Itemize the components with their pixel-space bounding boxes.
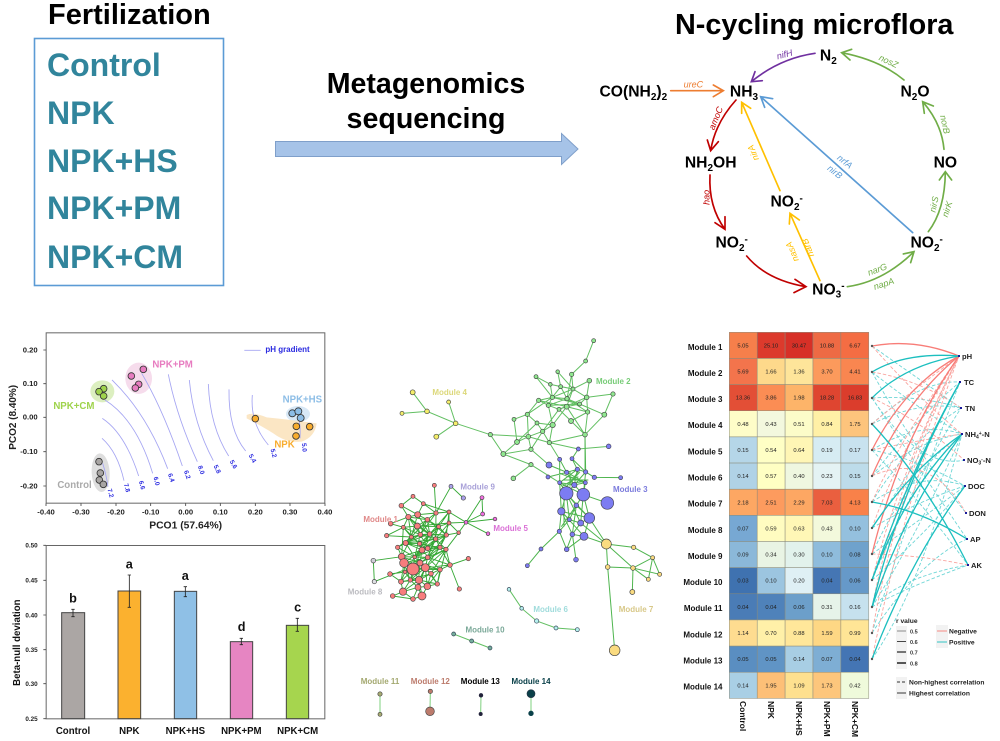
- row labels: Module 4: [688, 421, 723, 430]
- arrow: nitrite to nitrate: [747, 256, 806, 293]
- axis titles: [8, 385, 222, 531]
- x axis ticks and labels: 0.10: [213, 508, 228, 517]
- nitrogen compound labels: 2: [912, 92, 918, 103]
- heatmap values: 0.63: [793, 526, 805, 532]
- module 5, 8, 9 nodes: [371, 484, 497, 584]
- x axis labels: [56, 726, 318, 737]
- y axis ticks and labels: [20, 345, 46, 490]
- text: Metagenomics sequencing: sequencing: [347, 103, 505, 135]
- highest negative correlations: [872, 344, 959, 554]
- arrow: narG napA: [847, 252, 914, 292]
- nitrogen compound labels: 2: [794, 202, 800, 213]
- soil property labels: NH: [965, 430, 976, 439]
- pH contour labels: 6.2: [182, 469, 192, 481]
- soil property labels: TC: [964, 378, 975, 387]
- legend: correlation lines: Positive: [949, 640, 975, 646]
- heatmap values: [736, 344, 862, 689]
- heatmap values: 3.70: [821, 370, 833, 376]
- pH contour labels: 7.8: [122, 483, 131, 494]
- module labels: Module 3: [613, 485, 648, 494]
- arrow: nosZ: nosZ: [877, 53, 900, 70]
- nitrogen compound labels: N: [820, 48, 831, 65]
- module 12 pair: [426, 689, 434, 716]
- heatmap values: 0.14: [737, 683, 749, 689]
- heatmap values: 0.10: [849, 526, 861, 532]
- y axis ticks and labels: -0.10: [20, 447, 38, 456]
- nitrogen compound labels: ): [656, 84, 662, 101]
- heatmap values: 0.23: [821, 474, 833, 480]
- chart: co-occurrence network: [348, 339, 662, 716]
- y axis title: Beta-null deviation: [12, 599, 23, 686]
- heatmap values: 0.40: [793, 474, 805, 480]
- row labels: Module 12: [683, 630, 723, 640]
- pH contour labels: 6.4: [166, 472, 176, 484]
- heatmap values: 0.04: [737, 605, 749, 611]
- heatmap values: 4.41: [849, 370, 861, 376]
- module 4 nodes: [400, 390, 458, 439]
- heatmap values: 1.09: [793, 683, 805, 689]
- heatmap values: 0.30: [793, 552, 805, 558]
- module endpoint dots: [871, 345, 873, 660]
- heatmap values: 0.07: [821, 657, 833, 663]
- arrow: norB: [923, 102, 952, 149]
- x axis ticks and labels: 0.40: [318, 508, 332, 517]
- nitrogen compound labels: [600, 48, 957, 301]
- nitrogen compound labels: 2: [662, 92, 668, 103]
- heatmap values: 0.04: [849, 657, 861, 663]
- group labels: NPK+HS: [283, 394, 323, 405]
- arrow: narG napA: narG: [866, 261, 888, 278]
- heatmap values: 4.13: [849, 500, 861, 506]
- x axis ticks and labels: 0.20: [248, 508, 263, 517]
- heatmap values: 0.54: [765, 448, 777, 454]
- nitrogen compound labels: NH: [685, 155, 707, 172]
- arrow: to N-cycling: [276, 134, 578, 164]
- heatmap values: 1.73: [821, 683, 833, 689]
- soil property labels: AK: [971, 561, 982, 570]
- arrow: nasA narB: narB: [800, 237, 816, 258]
- x axis ticks and labels: -0.20: [107, 508, 125, 517]
- heatmap values: 0.03: [737, 579, 749, 585]
- arrow: nirS nirK: [928, 172, 955, 232]
- panel: fertilization treatments: Control: [47, 47, 161, 83]
- axis titles: PCO2 (8.40%): [8, 385, 19, 450]
- x axis labels: NPK+PM: [221, 726, 262, 737]
- heatmap values: 5.69: [737, 370, 749, 376]
- nitrogen compound labels: 2: [707, 163, 713, 174]
- column labels: NPK+CM: [850, 701, 860, 737]
- non-highest positive correlations: [872, 346, 968, 659]
- module labels: [348, 377, 654, 686]
- heatmap values: 0.48: [737, 422, 749, 428]
- heatmap values: 0.17: [849, 448, 861, 454]
- network edges: module 3 and 7: [527, 435, 660, 650]
- soil property labels: -N: [982, 430, 990, 439]
- row labels: Module 9: [688, 552, 723, 561]
- y axis labels: 0.25: [25, 716, 38, 723]
- nitrogen compound labels: -: [745, 234, 748, 245]
- heatmap values: 0.42: [849, 683, 861, 689]
- pH contour labels: 5.4: [247, 453, 257, 465]
- significance letters: b: [69, 591, 77, 605]
- soil property labels: NO: [967, 456, 978, 465]
- significance letters: c: [294, 601, 301, 615]
- heatmap values: 0.04: [821, 579, 833, 585]
- y axis ticks and labels: -0.20: [20, 481, 38, 490]
- module labels: Module 1: [363, 515, 399, 524]
- heatmap values: 0.10: [821, 552, 833, 558]
- arrow: hao: hao: [701, 190, 711, 205]
- text: Metagenomics sequencing: Metagenomics: [327, 68, 525, 100]
- nitrogen compound labels: -: [800, 193, 803, 204]
- heatmap values: 0.06: [793, 605, 805, 611]
- module labels: Module 6: [533, 605, 569, 614]
- nitrogen compound labels: -: [841, 281, 845, 292]
- heatmap values: 0.09: [737, 552, 749, 558]
- arrow: ureC: ureC: [684, 79, 704, 89]
- text: Metagenomics sequencing: [327, 68, 525, 135]
- panel: fertilization treatments: NPK+CM: [47, 239, 183, 275]
- heatmap values: 30.47: [792, 344, 806, 350]
- heatmap values: 0.14: [793, 657, 805, 663]
- arrow: nrfA nirB: nirB: [825, 163, 844, 181]
- arrow: nirS nirK: nirK: [940, 199, 955, 218]
- significance letters: d: [238, 620, 246, 634]
- heatmap values: 0.16: [849, 605, 861, 611]
- legend: correlation lines: 0.5: [910, 630, 918, 636]
- module labels: Module 13: [461, 677, 500, 686]
- x axis labels: NPK+HS: [166, 726, 206, 737]
- column labels: NPK: [766, 701, 776, 720]
- heatmap values: 0.07: [737, 526, 749, 532]
- heatmap values: 1.36: [793, 370, 805, 376]
- heatmap values: 0.05: [765, 657, 777, 663]
- nitrogen compound labels: NO: [910, 235, 934, 252]
- column labels: Control: [738, 701, 748, 731]
- group labels: NPK+PM: [152, 360, 193, 371]
- row labels: Module 3: [688, 395, 723, 404]
- x axis labels: NPK+CM: [277, 726, 318, 737]
- heatmap values: 0.43: [821, 526, 833, 532]
- legend: correlation lines: Highest correlation: [909, 690, 970, 698]
- chart: beta-null deviation bars: [12, 543, 325, 737]
- heatmap values: 1.95: [765, 683, 777, 689]
- module labels: Module 4: [432, 388, 468, 397]
- row labels: Module 14: [683, 682, 723, 692]
- row labels: Module 7: [688, 500, 723, 508]
- heatmap values: 0.06: [849, 579, 861, 585]
- chart: PCoA scatter plot: [8, 333, 332, 531]
- heatmap values: 0.51: [793, 422, 805, 428]
- nitrogen compound labels: NO: [812, 281, 836, 298]
- row labels: Module 6: [688, 474, 723, 482]
- y axis labels: 0.30: [25, 681, 38, 688]
- arrow: nifH: nifH: [776, 47, 794, 61]
- heatmap values: 0.43: [765, 422, 777, 428]
- row labels: Module 13: [683, 656, 723, 666]
- panel: fertilization treatments: NPK+PM: [47, 190, 181, 226]
- nitrogen compound labels: 2: [934, 243, 940, 254]
- soil property labels: DOC: [968, 482, 985, 491]
- panel: fertilization treatments: NPK: [47, 95, 115, 131]
- heatmap values: 0.84: [821, 422, 833, 428]
- treatment group ellipses: [90, 363, 317, 492]
- module labels: Module 10: [465, 626, 505, 635]
- heatmap values: 0.10: [765, 579, 777, 585]
- arrow: ureC: [671, 79, 723, 97]
- legend: correlation lines: [896, 618, 984, 699]
- y axis ticks and labels: 0.20: [23, 345, 38, 354]
- soil property labels: pH: [962, 352, 972, 361]
- heatmap values: 0.88: [793, 631, 805, 637]
- heatmap values: 2.29: [793, 500, 805, 506]
- arrow: amoC: amoC: [707, 105, 725, 131]
- y axis labels: 0.35: [25, 647, 38, 654]
- pH gradient contour lines: [102, 373, 300, 487]
- group labels: [53, 360, 323, 491]
- heatmap values: 1.98: [793, 396, 805, 402]
- network edges: module 4: [402, 392, 456, 437]
- nitrogen compound labels: 2: [651, 92, 657, 103]
- module labels: Module 8: [348, 587, 383, 596]
- y axis ticks and labels: 0.00: [23, 413, 38, 422]
- legend: correlation lines: r value: [896, 618, 918, 625]
- soil property labels: TN: [965, 404, 975, 413]
- panel: fertilization treatments: NPK+HS: [47, 143, 178, 179]
- data points: [96, 366, 313, 488]
- pH contour labels: 5.2: [269, 448, 278, 459]
- y axis labels: [25, 543, 46, 723]
- heatmap values: 3.86: [765, 396, 777, 402]
- module 7 nodes: [601, 539, 662, 656]
- column labels: [738, 701, 860, 737]
- network edges: module 1, 5, 8, 9: [373, 485, 495, 599]
- heatmap values: 0.14: [737, 474, 749, 480]
- heatmap values: 1.66: [765, 370, 777, 376]
- soil property labels: -: [981, 457, 983, 463]
- heatmap cells: [729, 332, 869, 698]
- heatmap values: 13.36: [736, 396, 750, 402]
- module labels: Module 7: [619, 605, 654, 614]
- group labels: NPK+CM: [53, 401, 94, 412]
- x axis ticks and labels: [37, 503, 332, 517]
- arrow: nirS nirK: nirS: [928, 196, 941, 213]
- module 6 chain: [507, 587, 579, 632]
- row labels: [683, 343, 723, 692]
- x axis labels: Control: [56, 726, 90, 737]
- nitrogen compound labels: 2: [831, 56, 837, 67]
- module labels: Module 11: [361, 677, 400, 686]
- pH contour labels: [106, 443, 308, 499]
- pH contour labels: 5.8: [212, 464, 222, 475]
- arrow: norB: norB: [938, 114, 952, 135]
- heatmap values: 0.31: [821, 605, 833, 611]
- x axis ticks and labels: 0.00: [178, 508, 193, 517]
- row labels: Module 8: [688, 526, 723, 535]
- module labels: Module 12: [411, 677, 450, 686]
- significance letters: [69, 557, 301, 634]
- arrow: narG napA: napA: [872, 276, 895, 292]
- module 2 nodes: [488, 339, 615, 481]
- legend: correlation lines: 0.6: [910, 640, 918, 646]
- column labels: NPK+HS: [794, 701, 804, 736]
- row labels: Module 2: [688, 369, 723, 378]
- row labels: Module 10: [683, 578, 723, 587]
- y axis labels: 0.45: [25, 578, 38, 585]
- group labels: NPK: [274, 440, 295, 451]
- heatmap values: 0.57: [765, 474, 777, 480]
- heatmap values: 5.05: [737, 344, 749, 350]
- legend: correlation lines: Non-highest correlation: [909, 680, 984, 686]
- bars: [62, 591, 309, 719]
- pH contour labels: 5.6: [228, 459, 238, 471]
- significance letters: a: [182, 569, 190, 583]
- arrow: nasA narB: nasA: [784, 240, 801, 263]
- nitrogen compound labels: CO(NH: [600, 84, 651, 101]
- heatmap values: 1.14: [737, 631, 749, 637]
- y axis labels: 0.40: [25, 612, 38, 619]
- arrow: nirA: [742, 102, 780, 191]
- x axis ticks and labels: -0.30: [72, 508, 90, 517]
- nitrogen compound labels: 3: [836, 290, 842, 301]
- nitrogen compound labels: NH: [730, 84, 753, 101]
- heatmap values: 0.70: [765, 631, 777, 637]
- nitrogen compound labels: 3: [753, 92, 759, 103]
- soil property labels: AP: [970, 535, 981, 544]
- heatmap values: 2.51: [765, 500, 777, 506]
- nitrogen compound labels: OH: [713, 155, 737, 172]
- module 3 nodes: [525, 444, 623, 568]
- nitrogen compound labels: NO: [770, 194, 794, 211]
- significance letters: a: [126, 557, 134, 571]
- heatmap values: 0.34: [765, 552, 777, 558]
- module labels: Module 5: [493, 524, 529, 533]
- legend: correlation lines: 0.8: [910, 662, 918, 668]
- error bars: [71, 575, 299, 645]
- heatmap values: 1.75: [849, 422, 861, 428]
- arrow: nrfA nirB: [761, 97, 913, 233]
- x axis ticks and labels: 0.30: [283, 508, 297, 517]
- chart: module heatmap: [683, 332, 869, 737]
- chart: module to soil property correlations: [871, 344, 991, 660]
- nitrogen compound labels: NO: [715, 235, 739, 252]
- heatmap values: 1.59: [821, 631, 833, 637]
- module 1 nodes: [384, 483, 470, 601]
- row labels: Module 1: [688, 343, 723, 352]
- heatmap values: 0.08: [849, 552, 861, 558]
- heatmap values: 0.20: [793, 579, 805, 585]
- non-highest negative correlations: [872, 346, 968, 659]
- arrow: nifH: [751, 47, 815, 82]
- arrow: nrfA nirB: nrfA: [835, 153, 854, 171]
- y axis labels: 0.50: [25, 543, 38, 550]
- arrow: nosZ: [842, 49, 904, 80]
- pH contour labels: 8.0: [196, 465, 206, 476]
- soil property labels: -N: [983, 456, 991, 465]
- network edges: upper clusters: [456, 341, 613, 483]
- heatmap values: 16.83: [848, 396, 862, 402]
- heatmap values: 0.99: [849, 631, 861, 637]
- module labels: Module 14: [511, 677, 551, 686]
- column labels: NPK+PM: [822, 701, 832, 737]
- nitrogen compound labels: N: [900, 84, 912, 101]
- legend: pH gradient: pH gradient: [265, 345, 310, 354]
- module 10 chain: [452, 632, 492, 650]
- legend: pH gradient: [244, 345, 310, 354]
- soil property labels: 4: [976, 434, 979, 440]
- soil property endpoints: [958, 355, 969, 566]
- heading: N-cycling microflora: N-cycling microflora: [675, 9, 954, 41]
- nitrogen compound labels: 2: [739, 243, 745, 254]
- heatmap values: 25.10: [764, 344, 778, 350]
- heatmap values: 0.19: [821, 448, 833, 454]
- axis titles: PCO1 (57.64%): [149, 520, 222, 531]
- x axis ticks and labels: -0.10: [142, 508, 159, 517]
- nitrogen compound labels: -: [940, 234, 943, 245]
- x axis ticks and labels: -0.40: [37, 508, 55, 517]
- heatmap values: 7.03: [821, 500, 833, 506]
- heatmap values: 6.67: [849, 344, 861, 350]
- module 14 pair: [527, 690, 535, 716]
- soil property labels: +: [979, 431, 982, 437]
- arrow: nirA: nirA: [746, 144, 761, 162]
- heatmap values: 0.04: [765, 605, 777, 611]
- arrow: hao: [701, 175, 725, 229]
- pH contour labels: 5.0: [300, 443, 308, 453]
- pH contour labels: 7.2: [106, 488, 115, 499]
- soil property labels: 3: [978, 460, 981, 466]
- highest positive correlations: [872, 355, 968, 659]
- legend: correlation lines: 0.7: [910, 650, 918, 656]
- module 13 pair: [479, 693, 483, 716]
- panel: fertilization treatments: [34, 38, 224, 286]
- row labels: Module 11: [684, 604, 723, 613]
- module labels: Module 2: [596, 377, 631, 386]
- module labels: Module 9: [460, 482, 496, 491]
- arrow: amoC: [707, 100, 736, 151]
- pH contour labels: 6.0: [152, 476, 161, 487]
- soil property labels: [962, 352, 991, 570]
- module 11 pair: [378, 692, 382, 716]
- heatmap values: 0.15: [737, 448, 749, 454]
- group labels: Control: [57, 480, 92, 491]
- soil property labels: DON: [969, 509, 986, 518]
- heatmap values: 18.28: [820, 396, 834, 402]
- legend: correlation lines: Negative: [949, 628, 977, 636]
- nitrogen compound labels: NO: [934, 155, 957, 172]
- y axis ticks and labels: 0.10: [23, 379, 38, 388]
- heatmap values: 2.18: [737, 500, 749, 506]
- x axis labels: NPK: [119, 726, 140, 737]
- nitrogen compound labels: O: [917, 84, 930, 101]
- heatmap values: 0.59: [765, 526, 777, 532]
- heatmap values: 0.15: [849, 474, 861, 480]
- pH contour labels: 6.6: [137, 480, 146, 491]
- diagram: nitrogen cycle: [600, 47, 957, 301]
- heatmap values: 0.64: [793, 448, 805, 454]
- row labels: Module 5: [688, 448, 723, 456]
- heatmap values: 10.88: [820, 344, 834, 350]
- arrow: nasA narB: [784, 213, 820, 281]
- heatmap values: 0.05: [737, 657, 749, 663]
